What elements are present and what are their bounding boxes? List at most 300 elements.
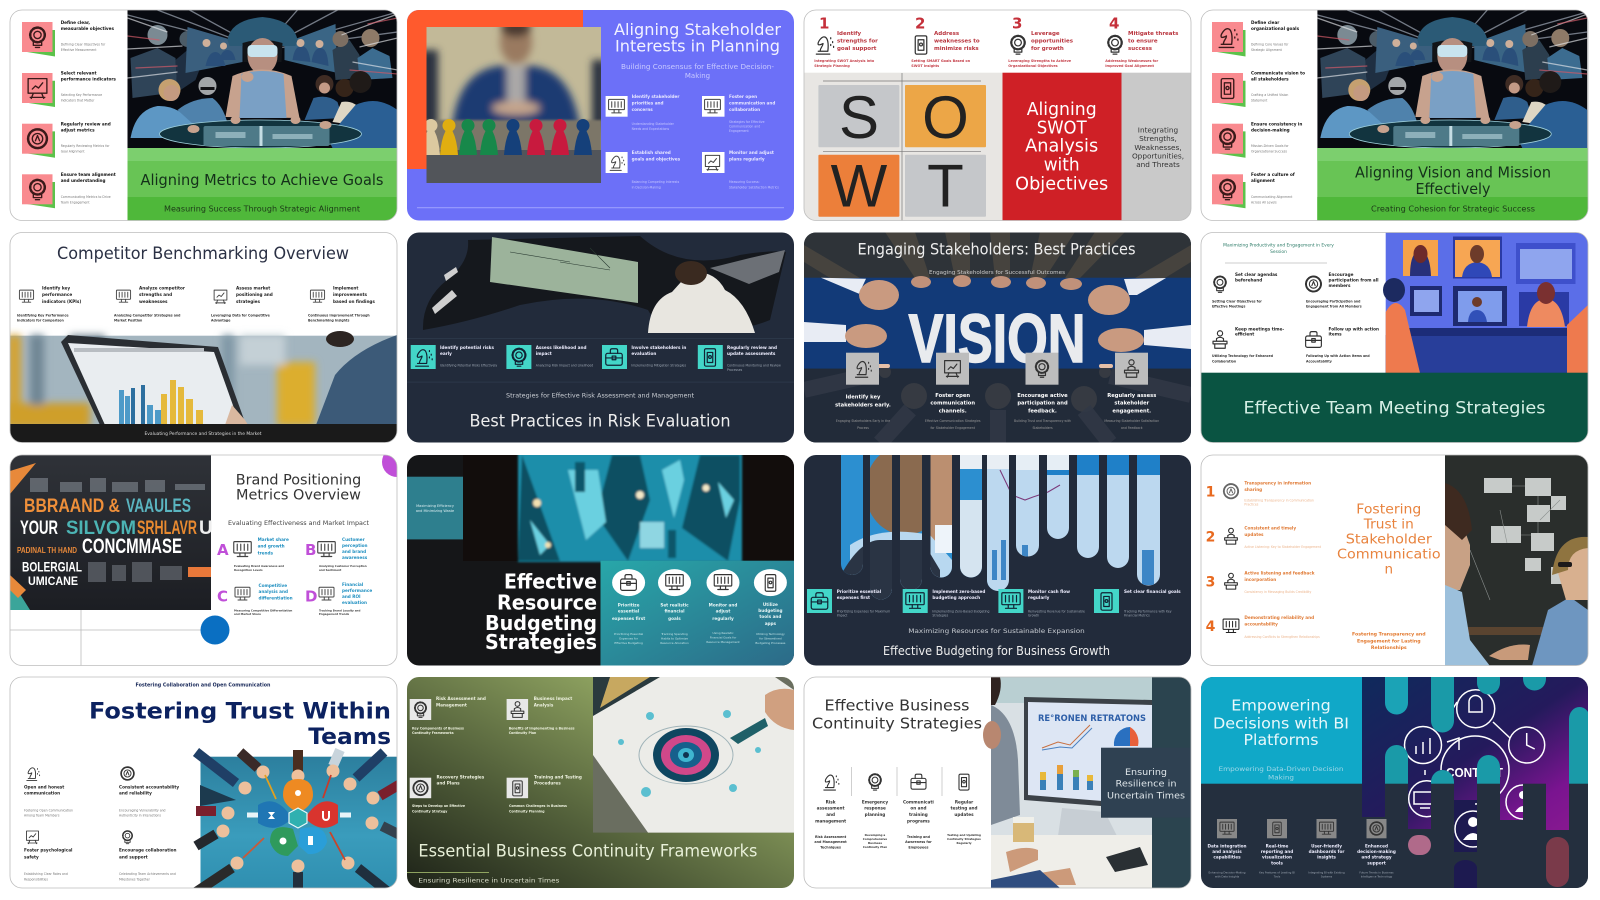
item 4: Testing and Updating <box>947 833 981 837</box>
item 3 <box>410 775 485 813</box>
item 3: dashboards for <box>1309 849 1345 854</box>
item 3: Continuity Strategy <box>412 809 448 813</box>
step 1: Expenses for <box>619 636 639 640</box>
item 1 <box>1207 819 1247 878</box>
item 2: Analyzing Risk Impact and Likelihood <box>536 363 593 367</box>
item 3: Consistency in Messaging Builds Credibility <box>1244 590 1312 594</box>
item 3: Employees <box>908 845 928 849</box>
panel: Aligning Stakeholder Interests in Planning <box>407 10 794 221</box>
item 1 <box>835 353 891 430</box>
photo: chalkboard with brand lettering: CONCMMASE <box>82 535 182 558</box>
item 3: 3 <box>1206 575 1215 591</box>
title: Trust in <box>1363 516 1414 532</box>
item 2 <box>1306 272 1379 309</box>
item 4: Continuous Improvement Through <box>308 314 370 318</box>
item 1: Risk <box>826 799 836 804</box>
item 3: Steps to Develop an Effective <box>412 804 465 808</box>
item 2: Continuity Plan <box>863 845 887 849</box>
item 2: response <box>864 805 886 810</box>
subtitle: Maximizing Resources for Sustainable Expansion <box>908 627 1085 635</box>
step 1: Effective Budgeting <box>614 641 643 645</box>
item D: Engagement Trends <box>319 612 350 616</box>
callout box: Resilience in <box>1116 780 1176 790</box>
item 4 <box>119 831 177 882</box>
title: n <box>1385 561 1393 577</box>
item 4: updates <box>954 812 974 817</box>
item 4 <box>1104 353 1159 430</box>
item 1: Set clear agendas <box>1235 272 1278 277</box>
subtitle: Ensuring Resilience in Uncertain Times <box>418 877 560 885</box>
item 3: incorporation <box>1244 577 1276 582</box>
item 2: Effective Communication Strategies <box>925 419 981 423</box>
subtitle: Creating Cohesion for Strategic Success <box>1371 205 1535 214</box>
item 4: accountability <box>1244 622 1278 627</box>
item 4: Implement <box>333 286 358 290</box>
step 1: goal support <box>837 46 877 52</box>
item 1: Indicators for Comparison <box>17 319 64 323</box>
item 2 <box>903 589 990 618</box>
item 2 <box>925 353 981 430</box>
item 4 <box>1357 819 1396 878</box>
photo: analytics monitor on a desk <box>983 677 1191 888</box>
item C: Measuring Competitive Differentiation <box>234 609 292 613</box>
photo: colleagues at a chalkboard <box>1445 455 1588 666</box>
item 3: Regularly Reviewing Metrics for <box>61 144 110 148</box>
title: Fostering Trust Within <box>89 699 391 724</box>
step 3 <box>706 569 740 644</box>
item 1: Risk Assessment and <box>436 696 486 701</box>
item 2: Business <box>868 841 882 845</box>
photo: chalkboard with brand lettering: U <box>199 518 213 539</box>
item 4: Demonstrating reliability and <box>1244 615 1314 620</box>
item 3: insights <box>1317 855 1336 860</box>
item 2: Market Position <box>114 319 143 323</box>
item C: analysis and <box>258 589 288 594</box>
item 3: Training and <box>907 835 931 839</box>
step 3: for growth <box>1031 46 1064 52</box>
item 1: Identifying Key Performance <box>17 314 69 318</box>
item B: Analyzing Customer Perception <box>319 564 367 568</box>
title: Competitor Benchmarking Overview <box>57 244 349 264</box>
item 1: organizational goals <box>1251 26 1300 31</box>
item 1: Key Components of Business <box>412 726 464 730</box>
item 1: Identify key <box>42 286 70 290</box>
item 4: Measuring Stakeholder Satisfaction <box>1104 419 1159 423</box>
item 4: and understanding <box>61 178 106 183</box>
item 2: Communicate vision to <box>1251 70 1305 76</box>
item 1: Defining Core Values for <box>1251 42 1289 46</box>
item 3: Leveraging Data for Competitive <box>211 314 270 318</box>
item 2: Statement <box>1251 98 1268 102</box>
panel: Competitor Benchmarking Overview <box>5 232 397 443</box>
item 1 <box>1212 20 1300 56</box>
item 1: Management <box>436 703 467 708</box>
item 2: Consistent and timely <box>1244 525 1296 530</box>
item 1: Open and honest <box>24 784 64 789</box>
title: Empowering <box>1231 697 1331 715</box>
item 4: improvements <box>333 292 367 297</box>
item 2 <box>862 774 888 849</box>
SWOT tiles: W <box>831 152 888 220</box>
item B: Customer <box>342 537 366 542</box>
item 1: Identifying Potential Risks Effectively <box>440 363 497 367</box>
item 3: Keep meetings time- <box>1235 326 1284 331</box>
grey subtitle: Strengths, <box>1139 134 1177 143</box>
item: monitor plans: Monitor and adjust <box>729 150 774 155</box>
red title panel: with <box>1044 156 1080 176</box>
item 3 <box>1206 570 1315 594</box>
item 3: strategies <box>236 299 260 304</box>
item 1: expenses first <box>837 595 870 600</box>
item 4: Following Up with Action Items and <box>1306 354 1370 358</box>
panel: Effective Team Meeting Strategies <box>1201 232 1589 443</box>
item 2: Engagement from All Members <box>1306 305 1362 309</box>
item 3 <box>1014 353 1071 430</box>
subtitle: Maximizing Productivity and Engagement in Every <box>1223 243 1334 249</box>
title: Interests in Planning <box>615 37 780 56</box>
item 4: support <box>1367 860 1386 865</box>
item 2 <box>119 767 179 818</box>
title <box>1355 166 1550 197</box>
photo: hands around VISION table <box>804 232 1191 443</box>
step 3: opportunities <box>1031 38 1074 44</box>
item D: D <box>305 588 317 606</box>
item 3: Organizational Success <box>1251 150 1287 154</box>
item: priorities: priorities and <box>632 100 664 106</box>
step 2: Setting SMART Goals Based on <box>911 59 971 63</box>
red title panel: SWOT <box>1037 118 1087 138</box>
item 4: Benchmarking Insights <box>308 319 349 323</box>
item 3: decision-making <box>1251 128 1290 132</box>
title band: Effective Team Meeting Strategies <box>1244 398 1546 418</box>
item 3: Recovery Strategies <box>436 775 485 780</box>
item 2: Business Impact <box>534 696 572 701</box>
step 4: Improved Goal Alignment <box>1105 64 1154 68</box>
step 4: budgeting <box>758 608 783 613</box>
item B: and brand <box>342 549 366 554</box>
title <box>236 472 361 503</box>
item 1: management <box>815 818 846 823</box>
step 1: Identify <box>837 31 862 37</box>
item 2 <box>1259 819 1295 878</box>
step 3: Financial Goals for <box>710 636 737 640</box>
item: priorities: Identify stakeholder <box>632 94 680 99</box>
subtitle: Making <box>685 72 710 80</box>
item 4: decision-making <box>1357 849 1396 854</box>
item: priorities <box>606 94 680 131</box>
item 4: Regular <box>955 799 974 804</box>
item 4: Ensure team alignment <box>61 172 116 177</box>
item 2: Crafting a Unified Vision <box>1251 93 1288 97</box>
item 1: communication <box>24 790 60 795</box>
item 2: members <box>1328 283 1351 288</box>
item 3 <box>903 774 934 849</box>
item 2 <box>507 696 575 735</box>
step 3: regularly <box>712 616 734 621</box>
item 3 <box>998 589 1085 618</box>
item: communication: Foster open <box>729 94 757 99</box>
item 2: Active Listening: Key to Stakeholder Engagement <box>1244 545 1322 549</box>
item 4: update assessments <box>727 351 776 356</box>
item 2: Assess likelihood and <box>536 345 586 350</box>
item 1 <box>410 696 486 735</box>
item 1: early <box>440 351 452 356</box>
item 2 <box>506 345 593 369</box>
item 3: Regularly review and <box>61 121 111 126</box>
panel: Effective Resource Budgeting Strategies <box>407 450 794 666</box>
step 1: Integrating SWOT Analysis into <box>814 59 875 63</box>
item 3: safety <box>24 854 39 859</box>
photo: chalkboard with brand lettering: BOLERGIAL <box>22 559 82 575</box>
item 3: programs <box>907 818 930 823</box>
step 4: Addressing Weaknesses for <box>1105 59 1158 63</box>
SWOT tiles: T <box>927 152 964 220</box>
item 2: strengths and <box>139 292 172 297</box>
item 4: Future Trends in Business <box>1359 870 1394 874</box>
item 2: Analyze competitor <box>139 286 186 290</box>
item 1: and analysis <box>1212 849 1242 854</box>
item 3: participation and <box>1017 401 1068 407</box>
subtitle: Measuring Success Through Strategic Alignment <box>164 205 360 214</box>
teal steps panel <box>600 561 794 666</box>
item A: trends <box>258 551 273 556</box>
item 2: Analyzing Competitor Strategies and <box>114 314 181 318</box>
illustration: video meeting <box>1383 232 1589 373</box>
item 4: Intelligence Technology <box>1361 874 1393 878</box>
item 2: Implementing Zero-Based Budgeting <box>932 610 990 614</box>
item 3: positioning and <box>236 292 273 297</box>
item A <box>217 537 289 572</box>
item: communication: Engagement <box>729 129 750 133</box>
item D: and ROI <box>342 594 361 599</box>
item D: Financial <box>342 582 364 587</box>
item 4: and Feedback <box>1121 426 1143 430</box>
item B <box>305 537 368 572</box>
item 3 <box>22 121 111 158</box>
item 1: Risk Assessment <box>815 835 847 839</box>
photo: chalkboard with brand lettering: YOUR <box>20 518 58 539</box>
callout box: Uncertain Times <box>1107 791 1185 801</box>
title <box>1337 501 1441 577</box>
item 4: Accountability <box>1306 359 1333 363</box>
item 4: Common Challenges in Business <box>509 804 567 808</box>
step 3: adjust <box>716 609 730 614</box>
item 2: Authenticity in Interactions <box>119 814 161 818</box>
step 4: Utilizing Technology <box>756 632 785 636</box>
illustration: hands around a puzzle flower <box>196 750 402 892</box>
item: monitor plans: Stakeholder Satisfaction Metrics <box>729 186 779 190</box>
item 4: based on findings <box>333 299 375 304</box>
step 1: essential <box>618 609 640 614</box>
green title band <box>128 148 398 221</box>
red title panel: Objectives <box>1015 174 1108 194</box>
step 4: to ensure <box>1128 38 1158 44</box>
item 4: and strategy <box>1361 855 1392 860</box>
item: communication: communication and <box>729 100 775 106</box>
item 3: evaluation <box>631 351 656 356</box>
item 1: Identify key <box>846 394 881 400</box>
item 3: on and <box>910 805 926 810</box>
item 4: Regularly assess <box>1107 393 1156 399</box>
grey subtitle: Integrating <box>1138 126 1178 135</box>
item 1: Practices <box>1244 502 1259 506</box>
green title band <box>1317 148 1588 221</box>
item 1: Impact <box>837 614 848 618</box>
item 4: Across All Levels <box>1251 200 1277 204</box>
title: Effective <box>504 569 597 593</box>
item 4: Regularly <box>956 841 972 845</box>
item 2: participation from all <box>1328 277 1379 282</box>
photo: swoosh with chalkboard and man <box>423 236 786 333</box>
item 2: Indicators that Matter <box>61 98 95 102</box>
item 1: Engaging Stakeholders Early in the <box>836 419 890 423</box>
teal caption box <box>407 477 463 539</box>
item 3: Communicati <box>903 799 934 804</box>
item 3 <box>1212 121 1302 158</box>
item 4: Tracking Performance with Key <box>1123 610 1172 614</box>
item 4: alignment <box>1251 178 1275 183</box>
subtitle: Fostering Transparency and <box>1352 632 1426 638</box>
SWOT tiles <box>818 73 986 221</box>
title: Effectively <box>1416 180 1491 198</box>
item 4 <box>22 172 116 208</box>
illustration: content cycle icons: CONTENT <box>1446 765 1503 780</box>
step 2: 2 <box>915 14 925 32</box>
item 3 <box>24 831 73 882</box>
step 3 <box>1008 14 1074 68</box>
title: Essential Business Continuity Frameworks <box>418 842 758 862</box>
item 4: items <box>1328 332 1342 337</box>
item 2 <box>114 286 186 323</box>
item 4: and support <box>119 854 148 859</box>
item C: C <box>217 588 228 606</box>
item 3: Assess market <box>236 286 270 290</box>
item 1 <box>17 286 81 323</box>
panel: Empowering Decisions with BI Platforms <box>1201 677 1590 890</box>
item 4 <box>698 345 781 372</box>
grey subtitle: Weaknesses, <box>1134 143 1182 152</box>
title: Effective Budgeting for Business Growth <box>883 643 1110 658</box>
teal caption box: Maximizing Efficiency <box>416 504 454 508</box>
item 3: Ensure consistency in <box>1251 121 1302 126</box>
panel: Aligning Vision and Mission Effectively <box>1201 10 1588 221</box>
item 2: Foster open <box>935 393 970 399</box>
title <box>1213 697 1349 749</box>
item 3: adjust metrics <box>61 128 95 132</box>
item B: and Sentiment <box>319 568 342 572</box>
step 2: SWOT Insights <box>911 64 939 68</box>
item 4: engagement. <box>1112 408 1151 414</box>
item 3 <box>602 345 686 369</box>
step 1 <box>612 569 645 645</box>
item 1: indicators (KPIs) <box>42 299 81 304</box>
item 1: stakeholders early. <box>835 403 891 409</box>
subtitle: Building Consensus for Effective Decision- <box>621 63 774 71</box>
item 1: Strategic Alignment <box>1251 48 1283 52</box>
item 1: 1 <box>1206 485 1215 501</box>
item 3: Building Trust and Transparency with <box>1014 419 1071 423</box>
step 2: Tracking Spending <box>660 632 688 636</box>
title <box>89 699 391 750</box>
footer bar <box>10 424 397 443</box>
title: Brand Positioning <box>236 472 361 488</box>
item 2: budgeting approach <box>932 595 980 600</box>
item: monitor plans: Measuring Success: <box>729 180 760 184</box>
title: Aligning Vision and Mission <box>1355 163 1551 181</box>
step 4 <box>1105 14 1179 68</box>
item 2: impact <box>536 351 552 356</box>
item 4: Encourage collaboration <box>119 848 177 853</box>
step 2 <box>911 14 980 68</box>
item 4: 4 <box>1206 619 1216 635</box>
item 4: Milestones Together <box>119 878 151 882</box>
step 2: weaknesses to <box>934 38 980 44</box>
item 4: testing and <box>950 805 978 810</box>
item 2: Encouraging Participation and <box>1306 299 1361 303</box>
photo: hands around VISION table: VISION <box>908 300 1086 377</box>
item A: Evaluating Brand Awareness and <box>234 564 284 568</box>
item 2: tools <box>1271 860 1283 865</box>
item A: A <box>217 541 229 559</box>
item 3: Foster psychological <box>24 848 73 853</box>
item D: performance <box>342 588 372 593</box>
title: Aligning Metrics to Achieve Goals <box>140 171 384 189</box>
step 2: Address <box>934 31 960 37</box>
photo: chalkboard with brand lettering: SILVOM <box>66 518 136 539</box>
step 3: Using Realistic <box>712 631 734 635</box>
item 2: all stakeholders <box>1251 77 1289 82</box>
item 3: Establishing Clear Roles and <box>24 872 68 876</box>
step 2: financial <box>664 609 685 614</box>
item 1: Among Team Members <box>24 814 60 818</box>
photo: chalkboard with brand lettering: SRHLAVR <box>137 518 197 539</box>
step 4 <box>754 569 787 645</box>
item 4: Enhanced <box>1365 843 1388 848</box>
item B: awareness <box>342 555 368 560</box>
item 1: Define clear, <box>61 20 90 25</box>
subtitle: Evaluating Effectiveness and Market Impact <box>228 519 369 527</box>
item 1 <box>1212 272 1278 309</box>
item 1: Effective Measurement <box>61 48 97 52</box>
item 2: channels. <box>939 408 967 414</box>
item 1: Transparency in information <box>1244 480 1311 485</box>
subtitle: Strategies for Effective Risk Assessment and Management <box>506 393 695 400</box>
item 4: Foster a culture of <box>1251 172 1295 177</box>
title: Effective Business <box>824 697 970 715</box>
title: Platforms <box>1244 731 1318 749</box>
grey subtitle: and Threats <box>1136 160 1180 169</box>
title: Teams <box>308 725 391 750</box>
item 3 <box>1308 819 1345 878</box>
item: communication <box>702 94 775 133</box>
photo: chalkboard with brand lettering: BBRAAND & <box>24 496 120 517</box>
item 1: Define clear <box>1251 20 1280 25</box>
item 1: Enhancing Decision-Making <box>1208 870 1246 874</box>
item: priorities: concerns <box>632 107 653 112</box>
photo: chalkboard with brand lettering: VAAULES <box>126 496 191 517</box>
panel: Engaging Stakeholders: Best Practices <box>804 232 1191 443</box>
grey subtitle: Opportunities, <box>1132 152 1184 161</box>
item: communication: collaboration <box>729 107 760 112</box>
item 2: Encouraging Vulnerability and <box>119 808 166 812</box>
item 4: Communicating Alignment <box>1251 195 1293 199</box>
item 3: Involve stakeholders in <box>631 345 686 350</box>
title <box>812 697 982 732</box>
photo: chalkboard with brand lettering: UMICANE <box>28 574 78 588</box>
teal caption box: and Minimizing Waste <box>416 509 454 513</box>
title: Stakeholder <box>1346 531 1432 547</box>
item B: B <box>305 541 316 559</box>
